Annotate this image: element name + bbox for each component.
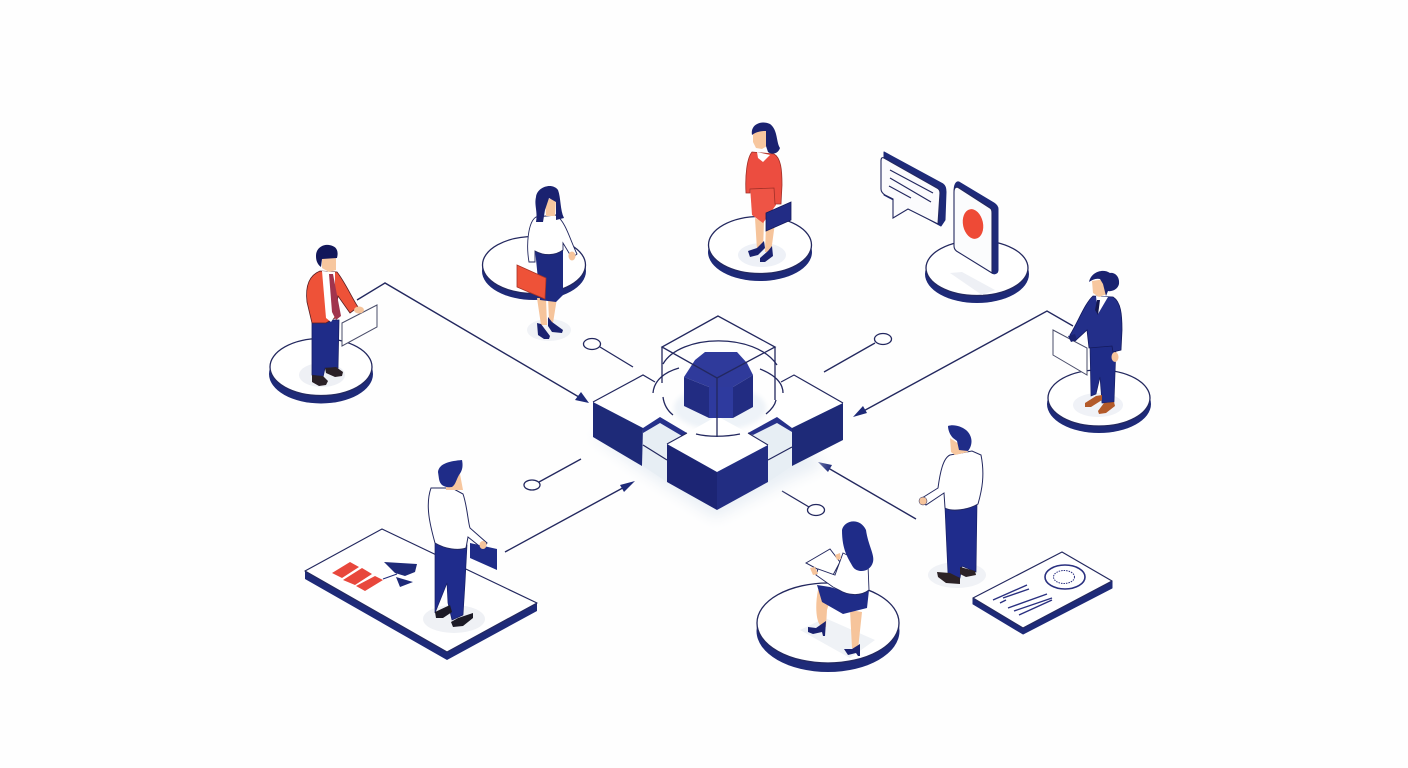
person: bottom-right man from behind <box>919 425 986 588</box>
object: speech bubble <box>881 152 946 226</box>
person: seated woman with tablet <box>806 521 873 656</box>
red dot <box>960 207 986 241</box>
central hub <box>592 316 843 518</box>
arrow: bottom-left person to hub <box>505 481 635 552</box>
hub block: front <box>667 416 768 510</box>
brown shoes <box>1085 395 1115 414</box>
hair <box>752 122 780 154</box>
face <box>545 198 556 216</box>
hub ground shadow <box>592 430 825 518</box>
platform: left person disc <box>269 338 373 404</box>
legs <box>816 590 862 650</box>
tablet <box>342 305 377 346</box>
person: woman in white blouse and navy skirt <box>517 186 577 341</box>
card text lines <box>993 585 1052 615</box>
arrow: right person to hub <box>853 311 1073 417</box>
hub wireframe cube <box>662 316 775 437</box>
card seal <box>1045 565 1085 589</box>
face <box>753 128 767 149</box>
platform: seated woman disc <box>756 583 900 672</box>
shoes <box>312 367 343 386</box>
face <box>1092 279 1107 297</box>
bubble text lines <box>889 170 933 202</box>
shirt and tie <box>322 271 335 322</box>
jacket <box>746 152 782 204</box>
shoes <box>435 605 473 627</box>
white shirt <box>428 488 487 549</box>
platform: top woman disc <box>708 216 812 281</box>
face <box>322 256 336 272</box>
pin: upper right <box>824 334 892 372</box>
platform: bottom-left rectangular plate <box>305 529 537 660</box>
legs <box>537 298 557 325</box>
hand <box>568 252 576 260</box>
platform: phone disc <box>925 240 1029 303</box>
jacket <box>307 271 358 323</box>
shirt collar <box>1096 296 1108 314</box>
hub core soft shadow <box>674 386 766 430</box>
trousers <box>1090 346 1116 403</box>
folder <box>470 543 497 570</box>
hair and bun <box>1089 271 1119 296</box>
navy briefcase <box>766 202 791 231</box>
hair <box>438 460 463 487</box>
high heels <box>748 241 773 262</box>
hands <box>1068 334 1077 342</box>
hub orbit arcs <box>653 341 783 436</box>
platform: bottom-right document card <box>973 552 1112 634</box>
skin at neck <box>446 474 463 490</box>
blouse <box>528 215 577 262</box>
person: woman in red suit with navy briefcase <box>746 122 791 262</box>
jacket and arm <box>1070 296 1122 352</box>
arrow: top-left person to hub <box>357 283 589 403</box>
hub connecting rails <box>643 445 792 460</box>
blouse <box>816 553 869 595</box>
object: smartphone with red dot <box>954 182 998 274</box>
pin: lower left <box>524 459 581 490</box>
skirt <box>817 585 869 614</box>
hair <box>948 425 972 451</box>
plate navy flag icon <box>383 562 417 587</box>
heels <box>808 621 860 656</box>
hair <box>535 186 564 222</box>
hands <box>810 553 841 575</box>
neck <box>950 438 968 455</box>
trousers <box>435 543 467 620</box>
hub notch right <box>753 423 792 482</box>
tablet <box>1053 330 1087 375</box>
hub block: right <box>748 375 843 466</box>
plate red stripes <box>332 562 383 591</box>
platform: right person disc <box>1047 370 1151 433</box>
hub notch left <box>643 423 682 482</box>
collar <box>757 152 770 162</box>
hub core: octagonal prism <box>684 352 753 418</box>
hand <box>354 306 364 314</box>
person: bottom-left man from behind with folder <box>428 460 497 627</box>
red briefcase <box>517 265 546 299</box>
skirt <box>750 186 776 223</box>
high heels <box>537 317 563 339</box>
connector pins <box>524 334 892 516</box>
hub block: left <box>593 375 687 466</box>
pin: lower right <box>782 491 824 516</box>
skirt <box>535 246 563 302</box>
connector arrows <box>357 283 1073 552</box>
hair <box>842 521 873 571</box>
trousers <box>945 503 977 578</box>
pin: upper left <box>584 338 633 367</box>
white shirt <box>922 451 983 510</box>
tablet <box>806 549 840 577</box>
trousers <box>312 320 339 377</box>
legs <box>755 218 775 252</box>
hair <box>316 245 338 267</box>
shoes <box>937 567 976 584</box>
person: left man in red jacket with tablet <box>307 245 377 386</box>
person: right woman in navy suit with tablet <box>1053 271 1122 414</box>
hand <box>919 497 927 505</box>
arrow: bottom-right person to hub <box>818 462 916 519</box>
hand <box>480 541 486 549</box>
platform: upper-left woman disc <box>482 236 586 300</box>
